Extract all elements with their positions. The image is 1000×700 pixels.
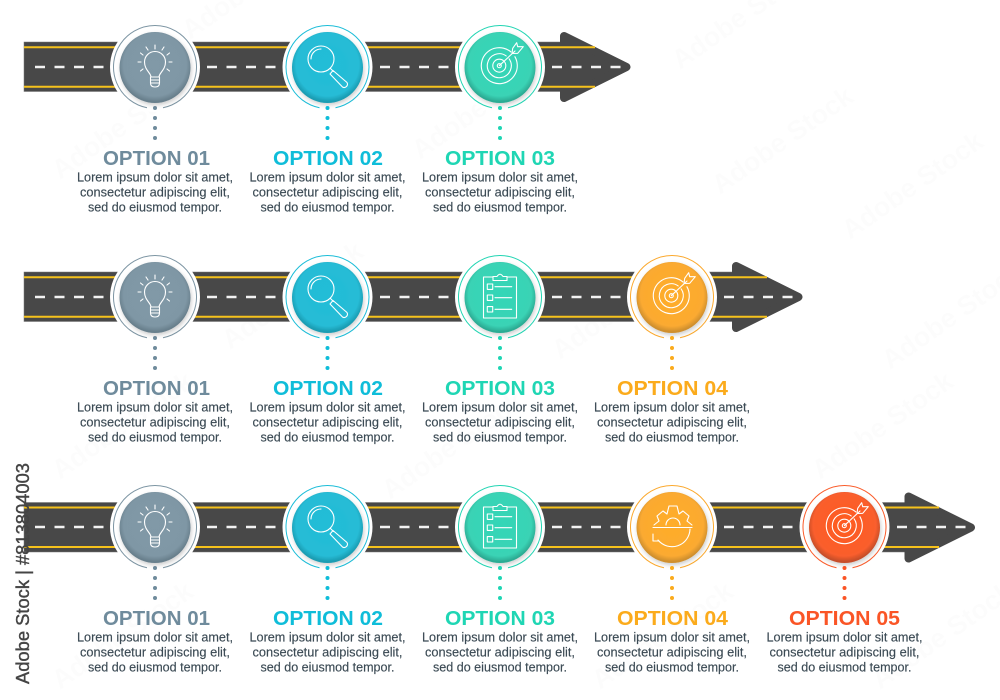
text block (422, 400, 578, 444)
heading: option 02: OPTION 02 (273, 607, 383, 630)
connector dots (842, 566, 846, 600)
panel: three-option road (24, 22, 626, 214)
background watermark: Adobe Stock (216, 235, 369, 355)
text block: Lorem ipsum dolor sit amet, (77, 170, 233, 184)
text block (422, 630, 578, 674)
icon: light bulb (138, 45, 172, 87)
background watermark: Adobe Stock (836, 125, 989, 245)
road with arrow (24, 266, 798, 328)
background watermark: Adobe Stock (46, 365, 199, 485)
icon: clipboard (484, 274, 516, 318)
icon: gear with cycle arrow (653, 506, 692, 547)
text block: Lorem ipsum dolor sit amet, (594, 400, 750, 414)
panel: five-option road (24, 482, 971, 674)
text block (250, 170, 406, 214)
text block: consectetur adipiscing elit, (252, 414, 402, 430)
step 2 (250, 252, 406, 444)
step 2 (250, 22, 406, 214)
text block: sed do eiusmod tempor. (260, 200, 394, 214)
text block (250, 400, 406, 444)
text block (594, 630, 750, 674)
connector dots (498, 106, 502, 140)
text block: Lorem ipsum dolor sit amet, (77, 400, 233, 414)
stock credit text: Adobe Stock | #813804003 (13, 463, 33, 684)
connector dots (498, 566, 502, 600)
heading: option 03: OPTION 03 (445, 147, 555, 170)
connector dots (153, 566, 157, 600)
step 1 (77, 252, 233, 444)
text block: Lorem ipsum dolor sit amet, (422, 170, 578, 184)
text block: Lorem ipsum dolor sit amet, (422, 400, 578, 414)
text block: Lorem ipsum dolor sit amet, (250, 170, 406, 184)
icon: light bulb (138, 505, 172, 547)
step 2 (250, 482, 406, 674)
text block: sed do eiusmod tempor. (605, 430, 739, 444)
heading: option 02: OPTION 02 (273, 147, 383, 170)
icon: target (653, 273, 695, 314)
heading: option 01: OPTION 01 (103, 377, 210, 400)
step 3 (422, 22, 578, 214)
text block: sed do eiusmod tempor. (433, 430, 567, 444)
connector dots (498, 336, 502, 370)
text block: sed do eiusmod tempor. (88, 200, 222, 214)
background watermark: Adobe Stock (46, 65, 199, 185)
text block: consectetur adipiscing elit, (425, 414, 575, 430)
text block: consectetur adipiscing elit, (252, 184, 402, 200)
step 4 (594, 252, 750, 444)
text block: sed do eiusmod tempor. (433, 660, 567, 674)
icon: target (826, 503, 868, 544)
text block: sed do eiusmod tempor. (433, 200, 567, 214)
step 5 (766, 482, 922, 674)
heading: option 01: OPTION 01 (103, 147, 210, 170)
text block (77, 170, 233, 214)
heading: option 02: OPTION 02 (273, 377, 383, 400)
text block: consectetur adipiscing elit, (80, 184, 230, 200)
text block: Lorem ipsum dolor sit amet, (422, 630, 578, 644)
text block: Lorem ipsum dolor sit amet, (594, 630, 750, 644)
text block: Lorem ipsum dolor sit amet, (250, 400, 406, 414)
step 4 (594, 482, 750, 674)
background watermark: Adobe Stock (546, 245, 699, 365)
text block (77, 400, 233, 444)
text block: consectetur adipiscing elit, (425, 184, 575, 200)
icon: target (481, 43, 523, 84)
panel: four-option road (24, 252, 798, 444)
text block: sed do eiusmod tempor. (778, 660, 912, 674)
text block: sed do eiusmod tempor. (260, 430, 394, 444)
icon: clipboard (484, 504, 516, 548)
connector dots (326, 106, 330, 140)
background watermark: Adobe Stock (376, 385, 529, 505)
text block (594, 400, 750, 444)
road with arrow (24, 496, 971, 558)
text block: consectetur adipiscing elit, (252, 644, 402, 660)
heading: option 04: OPTION 04 (617, 377, 729, 400)
background watermark: Adobe Stock (586, 575, 739, 695)
background watermark: Adobe Stock (806, 365, 959, 485)
text block (422, 170, 578, 214)
heading: option 01: OPTION 01 (103, 607, 210, 630)
icon: magnifier (308, 276, 347, 317)
heading: option 05: OPTION 05 (789, 607, 900, 630)
icon: light bulb (138, 275, 172, 317)
text block: sed do eiusmod tempor. (88, 660, 222, 674)
connector dots (670, 566, 674, 600)
connector dots (326, 336, 330, 370)
text block: sed do eiusmod tempor. (605, 660, 739, 674)
road with arrow (24, 36, 626, 98)
text block (250, 630, 406, 674)
text block: consectetur adipiscing elit, (597, 414, 747, 430)
text block: consectetur adipiscing elit, (425, 644, 575, 660)
text block: consectetur adipiscing elit, (770, 644, 920, 660)
heading: option 04: OPTION 04 (617, 607, 729, 630)
background watermark: Adobe Stock (406, 45, 559, 165)
icon: magnifier (308, 506, 347, 547)
step 1 (77, 22, 233, 214)
text block: sed do eiusmod tempor. (260, 660, 394, 674)
connector dots (326, 566, 330, 600)
step 3 (422, 482, 578, 674)
step 1 (77, 482, 233, 674)
text block: consectetur adipiscing elit, (80, 414, 230, 430)
heading: option 03: OPTION 03 (445, 607, 555, 630)
text block (766, 630, 922, 674)
step 3 (422, 252, 578, 444)
heading: option 03: OPTION 03 (445, 377, 555, 400)
background watermark: Adobe Stock (46, 575, 199, 695)
text block: Lorem ipsum dolor sit amet, (77, 630, 233, 644)
background watermark: Adobe Stock (706, 80, 859, 200)
text block (77, 630, 233, 674)
connector dots (670, 336, 674, 370)
text block: Lorem ipsum dolor sit amet, (766, 630, 922, 644)
text block: consectetur adipiscing elit, (597, 644, 747, 660)
text block: Lorem ipsum dolor sit amet, (250, 630, 406, 644)
text block: consectetur adipiscing elit, (80, 644, 230, 660)
connector dots (153, 336, 157, 370)
text block: sed do eiusmod tempor. (88, 430, 222, 444)
icon: magnifier (308, 46, 347, 87)
connector dots (153, 106, 157, 140)
